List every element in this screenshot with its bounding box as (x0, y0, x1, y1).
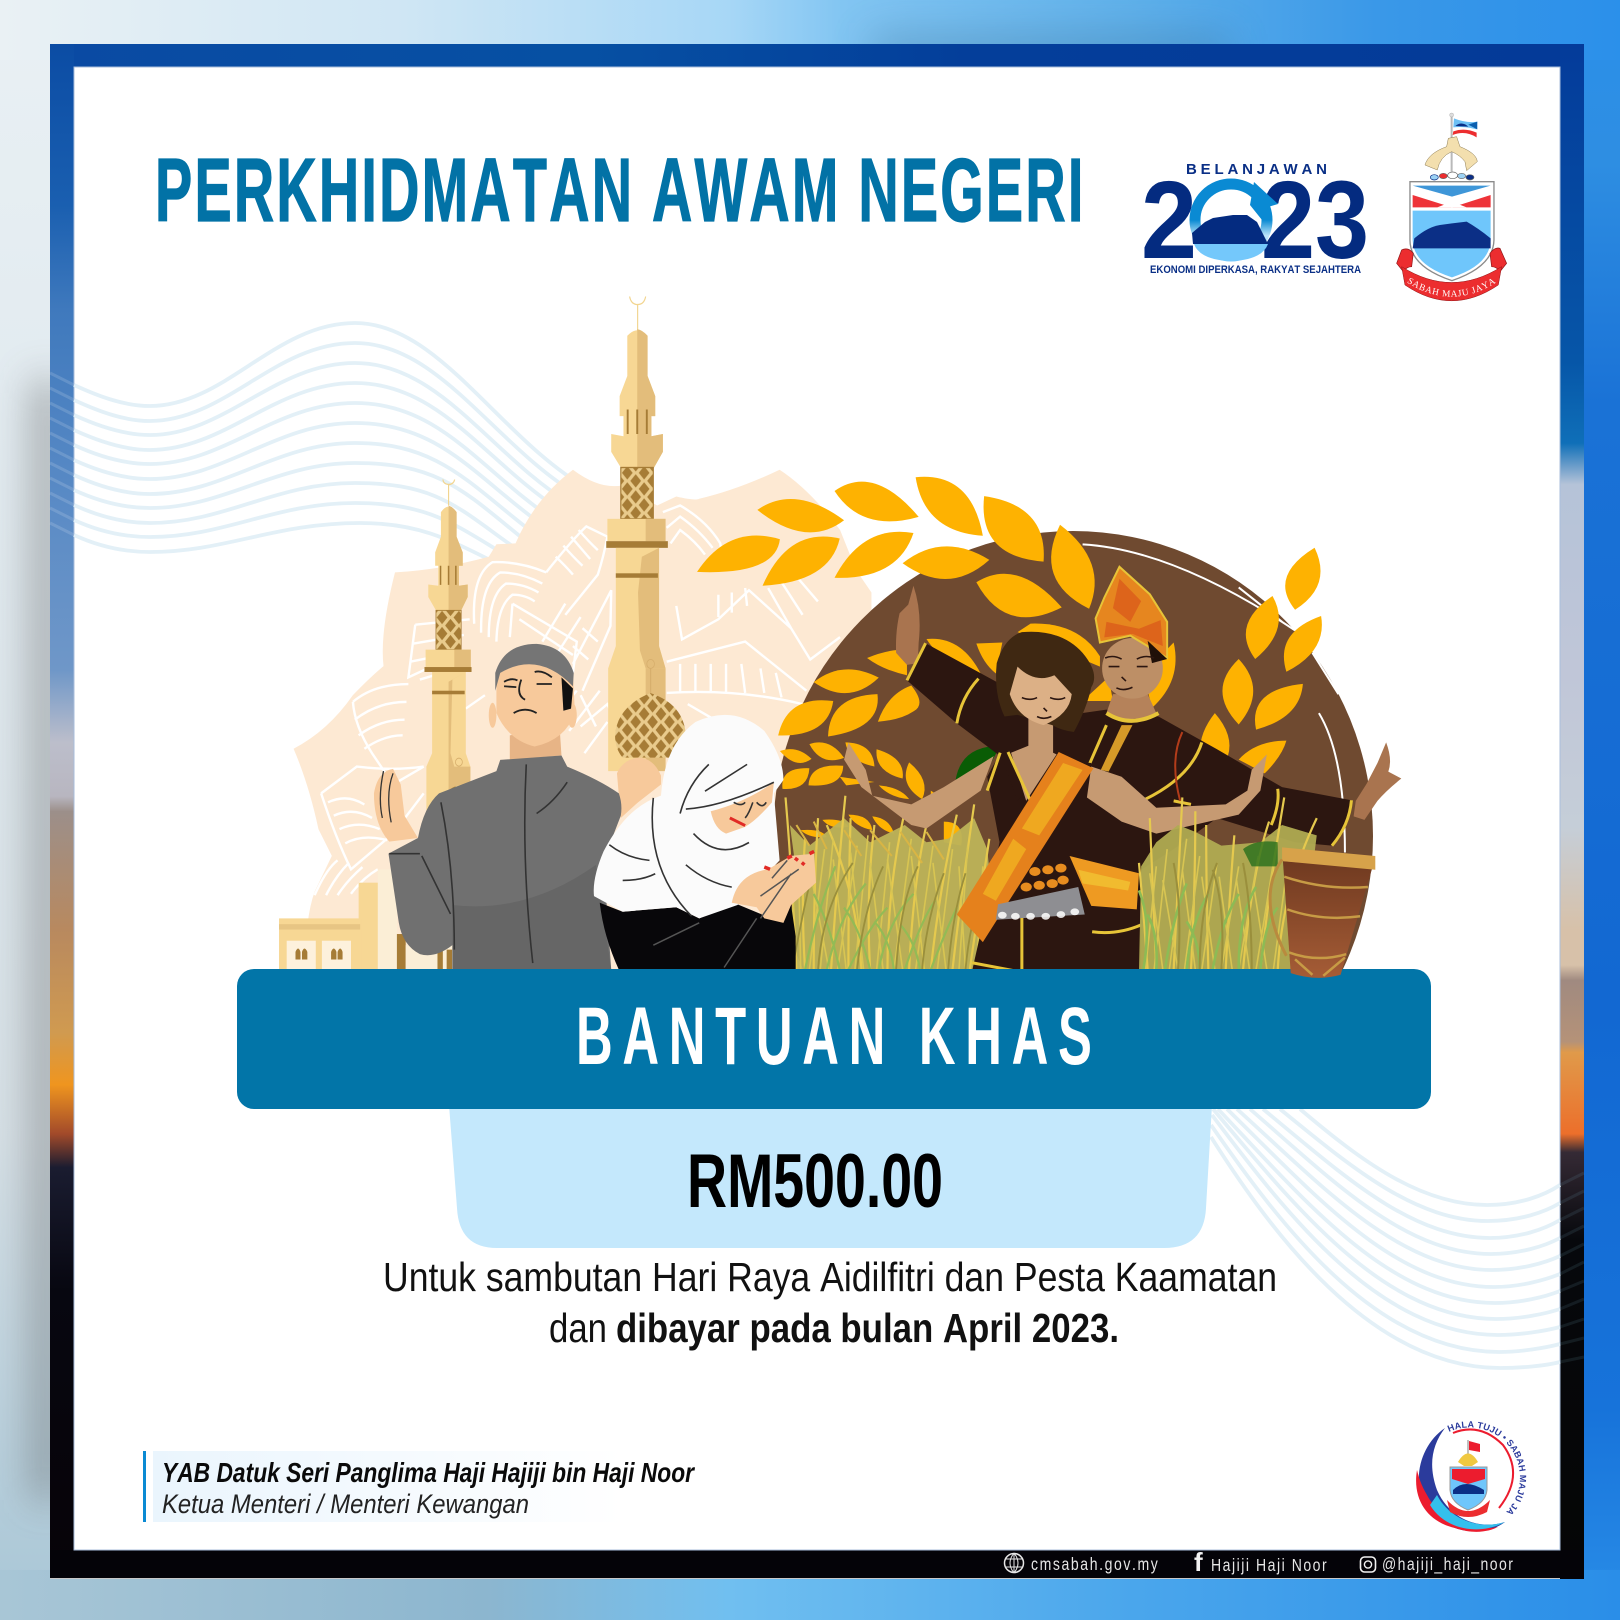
logo: Hala Tuju: HALA TUJU • SABAH MAJU JAYA (1447, 1421, 1526, 1514)
logo: Belanjawan 2023 (1141, 159, 1369, 282)
illustration: minarets and buildings (279, 297, 686, 970)
logo: Belanjawan 2023: 23 (1261, 159, 1369, 282)
amount: RM500.00: RM500.00 (687, 1139, 943, 1224)
description line 1: Untuk sambutan Hari Raya Aidilfitri dan Pesta Kaamatan (383, 1254, 1277, 1300)
wave lines: top left (74, 323, 590, 565)
wave lines: bottom right (1211, 1109, 1560, 1368)
female dancer (844, 632, 1267, 971)
footer: facebook (1194, 1547, 1328, 1577)
illustration: man praying (374, 644, 661, 970)
signature block: YAB Datuk Seri Panglima Haji Hajiji bin Haji Noor (162, 1457, 696, 1488)
description line 2: dibayar pada bulan April 2023. (616, 1305, 1119, 1351)
logo: Belanjawan 2023: BELANJAWAN (1186, 161, 1327, 178)
illustration: woman praying (594, 715, 816, 970)
footer: instagram: @hajiji_haji_noor (1382, 1554, 1514, 1574)
footer: facebook: f (1194, 1547, 1203, 1577)
banner: Bantuan Khas (237, 969, 1431, 1109)
amount panel (449, 1105, 1212, 1248)
description line 2: dan (549, 1305, 607, 1351)
footer: website: cmsabah.gov.my (1031, 1554, 1159, 1574)
logo: Belanjawan 2023: 2 (1141, 159, 1197, 282)
signature block: Ketua Menteri / Menteri Kewangan (162, 1489, 529, 1519)
footer: facebook: Hajiji Haji Noor (1211, 1555, 1328, 1575)
banner: Bantuan Khas: BANTUAN KHAS (576, 991, 1102, 1082)
illustration: Kadazan dancers (844, 567, 1401, 971)
small building (279, 869, 455, 970)
illustration: paddy field right (1139, 797, 1317, 973)
signature block (143, 1451, 696, 1522)
illustration: golden rice grains (697, 477, 1322, 846)
small minaret (424, 480, 472, 816)
male dancer (896, 567, 1401, 971)
illustration: mandala backdrop (294, 470, 871, 970)
illustration: paddy field left (783, 796, 1000, 973)
heading: Perkhidmatan Awam Negeri: PERKHIDMATAN AWAM NEGERI (155, 139, 1086, 240)
logo: Sabah crest: SABAH MAJU JAYA (1408, 278, 1496, 297)
illustration: harvest sun circle (774, 531, 1373, 969)
logo: Sabah crest (1396, 112, 1507, 302)
logo: Belanjawan 2023: EKONOMI DIPERKASA, RAKYAT SEJAHTERA (1150, 264, 1361, 276)
large minaret (606, 297, 686, 771)
illustration: woven basket (1270, 847, 1375, 978)
